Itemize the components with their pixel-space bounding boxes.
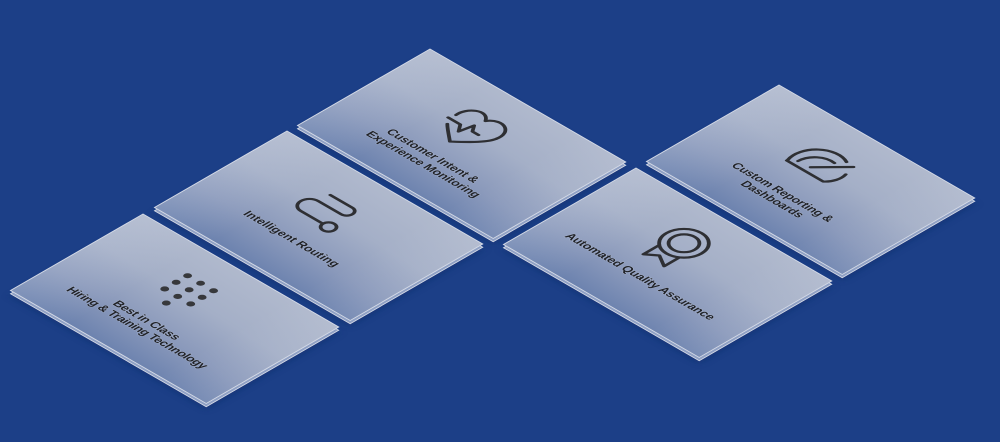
heading: Customer Intent & Experience Monitoring: Experience Monitoring xyxy=(362,129,485,200)
heading: Best in Class Hiring & Training Technology: Best in Class xyxy=(109,298,185,342)
heading: Best in Class Hiring & Training Technology: Hiring & Training Technology xyxy=(63,285,212,371)
icon: award ribbon xyxy=(637,223,719,271)
heading: Customer Intent & Experience Monitoring: Customer Intent & xyxy=(383,127,484,185)
icon: routing path xyxy=(287,190,363,234)
heading: Automated Quality Assurance: Automated Quality Assurance xyxy=(562,231,719,322)
panel: Best in Class Hiring & Training Technology xyxy=(5,214,344,410)
heading: Custom Reporting & Dashboards: Dashboards xyxy=(737,179,808,220)
heading: Intelligent Routing: Intelligent Routing xyxy=(240,209,344,269)
icon: gauge xyxy=(786,142,860,185)
panel: Intelligent Routing xyxy=(149,131,488,326)
panel: Customer Intent & Experience Monitoring xyxy=(292,49,631,244)
heading: Custom Reporting & Dashboards: Custom Reporting & xyxy=(728,160,838,224)
panel: Custom Reporting & Dashboards xyxy=(641,85,980,280)
panel: Automated Quality Assurance xyxy=(498,168,837,364)
icon: dot grid xyxy=(147,272,220,314)
icon: heart with pulse xyxy=(428,105,512,154)
